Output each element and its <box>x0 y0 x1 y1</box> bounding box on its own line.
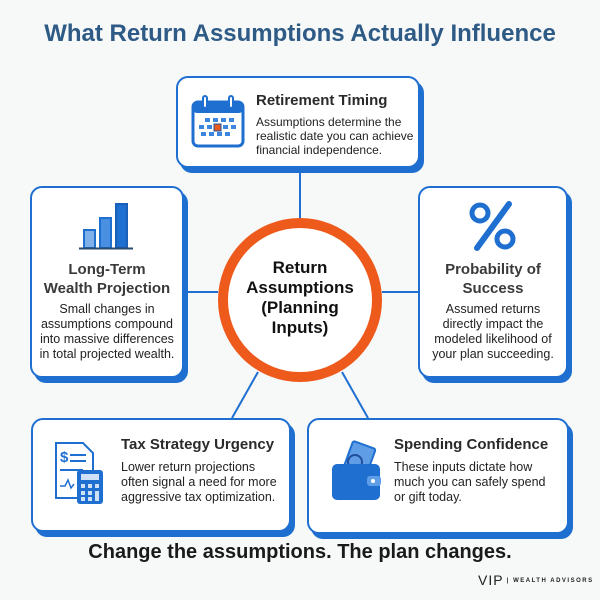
icon: bar chart <box>79 203 133 250</box>
text: into massive differences <box>40 332 174 346</box>
text: aggressive tax optimization. <box>121 490 275 504</box>
panel: retirement timing <box>176 76 420 168</box>
text: realistic date you can achieve <box>256 129 413 143</box>
text <box>394 460 545 504</box>
icon: wallet with money <box>332 440 381 500</box>
center text: Inputs) <box>272 318 328 337</box>
center text <box>246 258 354 337</box>
heading: Retirement Timing <box>256 92 387 109</box>
text: Small changes in <box>59 302 155 316</box>
center text: Assumptions <box>246 278 354 297</box>
icon: tax document with calculator: $ <box>60 449 69 466</box>
text: modeled likelihood of <box>434 332 552 346</box>
text: financial independence. <box>256 143 382 157</box>
text <box>40 302 174 361</box>
center text: Return <box>273 258 327 277</box>
logo: VIP | WEALTH ADVISORS <box>478 572 594 588</box>
text: often signal a need for more <box>121 475 277 489</box>
text: much you can safely spend <box>394 475 545 489</box>
heading <box>445 261 541 297</box>
heading: Success <box>463 280 523 297</box>
text: your plan succeeding. <box>432 347 554 361</box>
icon: calendar <box>192 95 244 148</box>
heading: Long-Term <box>68 261 146 278</box>
title: What Return Assumptions Actually Influence <box>44 20 556 47</box>
heading: Tax Strategy Urgency <box>121 436 274 453</box>
heading: Wealth Projection <box>44 280 170 297</box>
tagline: Change the assumptions. The plan changes. <box>88 541 512 563</box>
panel: spending confidence <box>307 418 569 534</box>
text <box>121 460 277 504</box>
heading: Spending Confidence <box>394 436 548 453</box>
text: directly impact the <box>443 317 543 331</box>
text: in total projected wealth. <box>40 347 174 361</box>
text <box>256 115 413 157</box>
icon: tax document with calculator <box>55 442 103 504</box>
panel: probability of success <box>418 186 568 378</box>
panel: tax strategy urgency <box>31 418 291 532</box>
heading: Probability of <box>445 261 541 278</box>
panel: long-term wealth projection <box>30 186 184 378</box>
heading <box>44 261 170 297</box>
text <box>432 302 554 361</box>
text: assumptions compound <box>41 317 173 331</box>
text: Assumptions determine the <box>256 115 401 129</box>
text: These inputs dictate how <box>394 460 532 474</box>
icon: percent <box>470 201 516 251</box>
text: Assumed returns <box>446 302 540 316</box>
text: Lower return projections <box>121 460 255 474</box>
central circle <box>218 218 382 382</box>
center text: (Planning <box>261 298 339 317</box>
text: or gift today. <box>394 490 462 504</box>
